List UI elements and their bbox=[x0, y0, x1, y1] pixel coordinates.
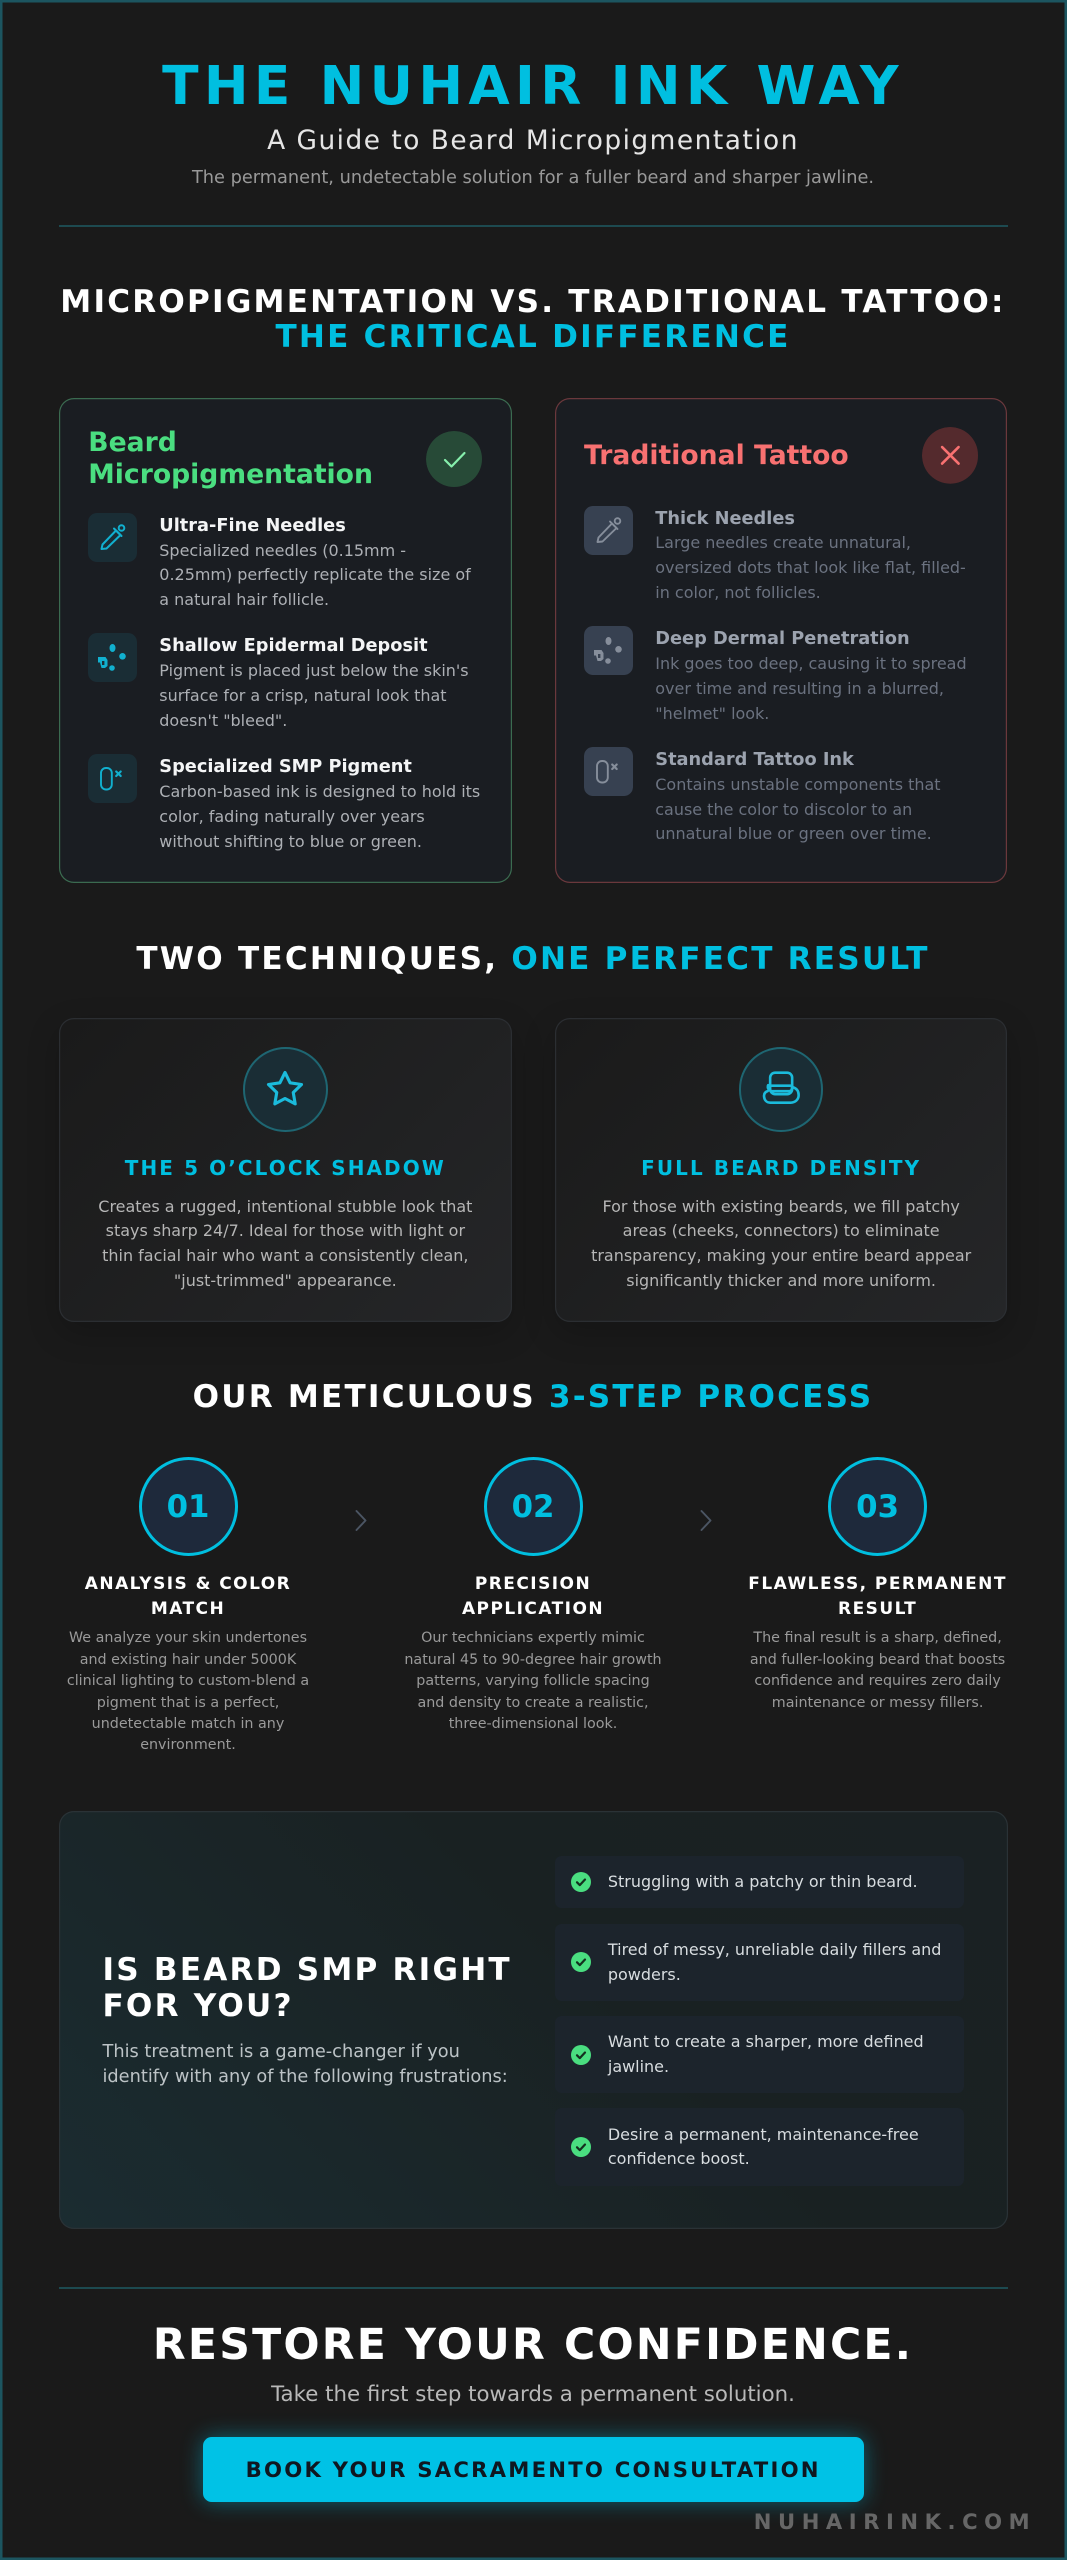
icon: ink vial bbox=[584, 747, 633, 796]
panel heading: FOR YOU? bbox=[102, 1988, 294, 2024]
icon: check bbox=[571, 2137, 591, 2157]
step title bbox=[462, 1574, 604, 1619]
item title: Shallow Epidermal Deposit bbox=[159, 636, 428, 656]
step title: ANALYSIS & COLOR bbox=[85, 1574, 291, 1594]
step text: The final result is a sharp, defined, bbox=[753, 1630, 1002, 1646]
step title bbox=[748, 1574, 1007, 1619]
step number text: 02 bbox=[512, 1489, 554, 1525]
heading: techniques: TWO TECHNIQUES, ONE PERFECT RESULT bbox=[136, 941, 930, 977]
item text: Struggling with a patchy or thin beard. bbox=[608, 1872, 918, 1891]
tagline: The permanent, undetectable solution for a fuller beard and sharper jawline. bbox=[192, 168, 874, 188]
arrow 2 bbox=[700, 1510, 712, 1531]
technique text: thin facial hair who want a consistently clean, bbox=[102, 1246, 468, 1265]
item text: 0.25mm) perfectly replicate the size of bbox=[159, 565, 471, 584]
step text: pigment that is a perfect, bbox=[97, 1695, 279, 1711]
step title: APPLICATION bbox=[462, 1599, 604, 1619]
icon: check bbox=[571, 1952, 591, 1972]
item text: confidence boost. bbox=[608, 2149, 750, 2168]
panel: full beard density bbox=[555, 1018, 1007, 1322]
item text bbox=[159, 541, 472, 609]
step number bbox=[484, 1457, 582, 1556]
step text: patterns, varying follicle spacing bbox=[416, 1673, 650, 1689]
step text: clinical lighting to custom-blend a bbox=[67, 1673, 309, 1689]
item title: Deep Dermal Penetration bbox=[655, 629, 910, 649]
item: specialized pigment bbox=[88, 754, 480, 851]
icon: needle bbox=[88, 513, 137, 562]
step text: natural 45 to 90-degree hair growth bbox=[404, 1652, 662, 1668]
technique text: "just-trimmed" appearance. bbox=[174, 1271, 397, 1290]
step title: MATCH bbox=[151, 1599, 225, 1619]
step text: We analyze your skin undertones bbox=[69, 1630, 307, 1646]
item title: Standard Tattoo Ink bbox=[655, 750, 854, 770]
button: book consultation: BOOK YOUR SACRAMENTO CONSULTATION bbox=[246, 2457, 821, 2482]
step text: and existing hair under 5000K bbox=[80, 1652, 296, 1668]
heading: comparison bbox=[60, 284, 1006, 355]
checklist item 4 bbox=[555, 2108, 964, 2186]
item text bbox=[655, 533, 966, 602]
panel: beard micropigmentation bbox=[59, 398, 512, 883]
icon: pigment dots bbox=[88, 633, 137, 682]
item text: surface for a crisp, natural look that bbox=[159, 686, 447, 705]
panel: is beard smp right for you bbox=[59, 1811, 1008, 2229]
item title: Thick Needles bbox=[655, 509, 795, 529]
subtitle: A Guide to Beard Micropigmentation bbox=[267, 125, 799, 156]
item text bbox=[655, 775, 941, 843]
icon: pigment dots bbox=[584, 626, 633, 675]
panel heading bbox=[88, 427, 373, 490]
step 3 bbox=[748, 1457, 1007, 1711]
item text: Contains unstable components that bbox=[655, 775, 941, 794]
panel: 5 o'clock shadow bbox=[59, 1018, 512, 1322]
icon: needle bbox=[584, 506, 633, 555]
header bbox=[162, 54, 904, 188]
item text: in color, not follicles. bbox=[655, 583, 821, 602]
step text: environment. bbox=[140, 1737, 236, 1753]
technique text: stays sharp 24/7. Ideal for those with light or bbox=[106, 1221, 465, 1240]
checklist item 2 bbox=[555, 1924, 964, 2001]
item text: Ink goes too deep, causing it to spread bbox=[655, 654, 967, 673]
step text: and fuller-looking beard that boosts bbox=[750, 1652, 1005, 1668]
item: shallow epidermal deposit bbox=[88, 633, 469, 730]
item text: Carbon-based ink is designed to hold its bbox=[159, 782, 480, 801]
step text: undetectable match in any bbox=[92, 1716, 284, 1732]
item title: Ultra-Fine Needles bbox=[159, 516, 346, 536]
item text: Want to create a sharper, more defined bbox=[608, 2032, 924, 2051]
item text: unnatural blue or green over time. bbox=[655, 824, 932, 843]
step 1 bbox=[67, 1457, 309, 1753]
item text: Desire a permanent, maintenance-free bbox=[608, 2125, 919, 2144]
step title: PRECISION bbox=[475, 1574, 591, 1594]
item text: Specialized needles (0.15mm - bbox=[159, 541, 406, 560]
website mark: NUHAIRINK.COM bbox=[754, 2509, 1036, 2534]
panel heading: Micropigmentation bbox=[88, 459, 373, 490]
item text bbox=[608, 2123, 919, 2172]
heading: comparison: THE CRITICAL DIFFERENCE bbox=[275, 319, 791, 355]
item text: without shifting to blue or green. bbox=[159, 832, 422, 851]
item text: Pigment is placed just below the skin's bbox=[159, 661, 469, 680]
step number text: 03 bbox=[856, 1489, 899, 1525]
panel heading bbox=[102, 1952, 512, 2024]
step title bbox=[84, 1574, 291, 1619]
item text bbox=[608, 2030, 924, 2080]
item text bbox=[159, 661, 469, 730]
step title: RESULT bbox=[838, 1599, 917, 1619]
step text bbox=[750, 1630, 1005, 1711]
step text: maintenance or messy fillers. bbox=[772, 1695, 983, 1711]
heading: comparison: MICROPIGMENTATION VS. TRADITIONAL TATTOO: bbox=[60, 284, 1006, 320]
item text: jawline. bbox=[608, 2057, 669, 2076]
footer heading: RESTORE YOUR CONFIDENCE. bbox=[153, 2320, 913, 2370]
technique text: areas (cheeks, connectors) to eliminate bbox=[623, 1221, 940, 1240]
technique text: transparency, making your entire beard appear bbox=[591, 1246, 971, 1265]
step text: confidence and requires zero daily bbox=[754, 1673, 1001, 1689]
item text: Large needles create unnatural, bbox=[655, 533, 911, 552]
button: book consultation bbox=[203, 2437, 864, 2502]
item: standard tattoo ink bbox=[584, 747, 941, 843]
icon: layered beard bbox=[739, 1047, 823, 1132]
step text: and density to create a realistic, bbox=[417, 1695, 649, 1711]
item title: Specialized SMP Pigment bbox=[159, 757, 412, 777]
item text: powders. bbox=[608, 1965, 681, 1984]
item: thick needles bbox=[584, 506, 966, 602]
step 2 bbox=[404, 1457, 662, 1732]
panel: traditional tattoo bbox=[555, 398, 1007, 883]
item text: color, fading naturally over years bbox=[159, 807, 425, 826]
item: ultra-fine needles bbox=[88, 513, 472, 609]
footer text: Take the first step towards a permanent solution. bbox=[271, 2382, 795, 2407]
technique text bbox=[98, 1196, 472, 1290]
panel heading: IS BEARD SMP RIGHT bbox=[102, 1952, 512, 1988]
item: deep dermal penetration bbox=[584, 626, 967, 723]
panel text: identify with any of the following frustrations: bbox=[102, 2067, 508, 2087]
step text: three-dimensional look. bbox=[449, 1716, 617, 1732]
step number bbox=[828, 1457, 927, 1556]
technique text: Creates a rugged, intentional stubble look that bbox=[98, 1196, 472, 1216]
item text: a natural hair follicle. bbox=[159, 590, 329, 609]
icon: ink vial bbox=[88, 754, 137, 803]
icon: check bbox=[571, 1872, 591, 1892]
item text bbox=[159, 782, 480, 851]
technique title: FULL BEARD DENSITY bbox=[641, 1156, 921, 1180]
item text: "helmet" look. bbox=[655, 704, 769, 723]
icon: check bbox=[571, 2045, 591, 2065]
technique text: significantly thicker and more uniform. bbox=[626, 1271, 936, 1290]
item text bbox=[608, 1938, 941, 1987]
item text: over time and resulting in a blurred, bbox=[655, 679, 944, 698]
item text: oversized dots that look like flat, filled- bbox=[655, 558, 966, 577]
heading: process: OUR METICULOUS 3-STEP PROCESS bbox=[193, 1379, 873, 1415]
step title: FLAWLESS, PERMANENT bbox=[748, 1574, 1007, 1594]
step number bbox=[138, 1457, 238, 1556]
panel heading: Traditional Tattoo bbox=[584, 440, 849, 471]
panel heading: Beard bbox=[88, 427, 177, 458]
step text: Our technicians expertly mimic bbox=[421, 1630, 645, 1646]
technique text: For those with existing beards, we fill patchy bbox=[602, 1196, 960, 1216]
item text bbox=[655, 654, 967, 723]
checklist item 3 bbox=[555, 2016, 964, 2093]
item text: doesn't "bleed". bbox=[159, 711, 287, 730]
icon: check badge bbox=[426, 431, 482, 487]
step number text: 01 bbox=[167, 1489, 209, 1525]
icon: cross badge bbox=[922, 427, 978, 484]
panel text: This treatment is a game-changer if you bbox=[102, 2042, 460, 2062]
arrow 1 bbox=[356, 1510, 366, 1531]
icon: star bbox=[243, 1047, 328, 1132]
item text: Tired of messy, unreliable daily fillers and bbox=[608, 1940, 941, 1959]
panel text bbox=[102, 2042, 508, 2087]
step text bbox=[67, 1630, 309, 1753]
item text: cause the color to discolor to an bbox=[655, 800, 912, 819]
technique title: THE 5 O’CLOCK SHADOW bbox=[125, 1156, 446, 1180]
checklist item 1 bbox=[555, 1856, 964, 1908]
title: THE NUHAIR INK WAY bbox=[162, 54, 904, 116]
technique text bbox=[591, 1196, 972, 1290]
step text bbox=[404, 1630, 662, 1732]
